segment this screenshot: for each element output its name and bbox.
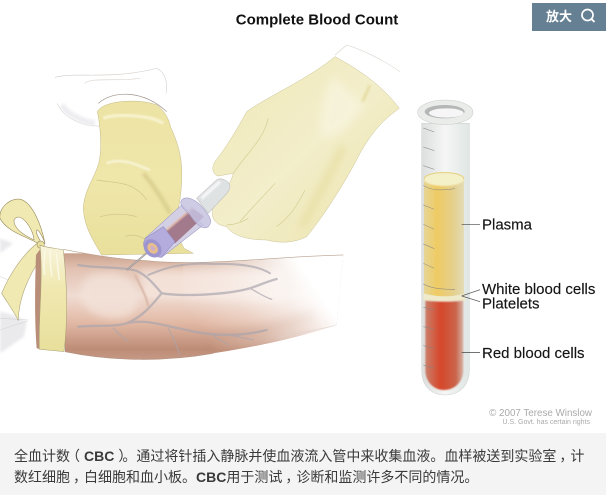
illustration title: Complete Blood Count [236, 12, 398, 28]
tube labels: Plasma [482, 216, 533, 234]
label leader lines [462, 224, 480, 353]
copyright credit: U.S. Govt. has certain rights [502, 419, 590, 426]
caption: 数红细胞，白细胞和血小板。CBC用于测试，诊断和监测许多不同的情况。 [14, 469, 478, 485]
tube scale marks [423, 128, 455, 368]
copyright credit [489, 408, 593, 426]
red blood cell layer [425, 301, 463, 390]
right gloved hand [212, 57, 399, 242]
tourniquet tails [0, 199, 45, 321]
arm with tourniquet, veins and gloves [0, 45, 400, 365]
plasma layer [424, 173, 464, 298]
tube labels: Platelets [482, 296, 540, 312]
copyright credit: © 2007 Terese Winslow [489, 408, 593, 419]
tube labels [482, 216, 595, 362]
caption [0, 433, 606, 495]
veins [78, 264, 277, 355]
zoom button [532, 3, 606, 31]
tube labels: Red blood cells [482, 345, 585, 362]
tube glass [422, 123, 469, 395]
right sleeve [335, 45, 400, 112]
test tube [418, 100, 480, 395]
buffy coat layer [423, 293, 465, 301]
needle [127, 252, 148, 270]
left gloved hand [83, 101, 193, 255]
left cuff [0, 227, 35, 360]
syringe [140, 179, 230, 261]
forearm [63, 249, 344, 360]
tourniquet band [35, 245, 67, 352]
tube rim [418, 100, 473, 125]
caption: 全血计数（ CBC ）。通过将针插入静脉并使血液流入管中来收集血液。血样被送到实验室，计 [14, 448, 584, 464]
zoom button: 放大 [546, 9, 572, 24]
left sleeve [55, 68, 172, 126]
tube labels: White blood cells [482, 281, 595, 298]
icon: magnifier [581, 8, 596, 23]
